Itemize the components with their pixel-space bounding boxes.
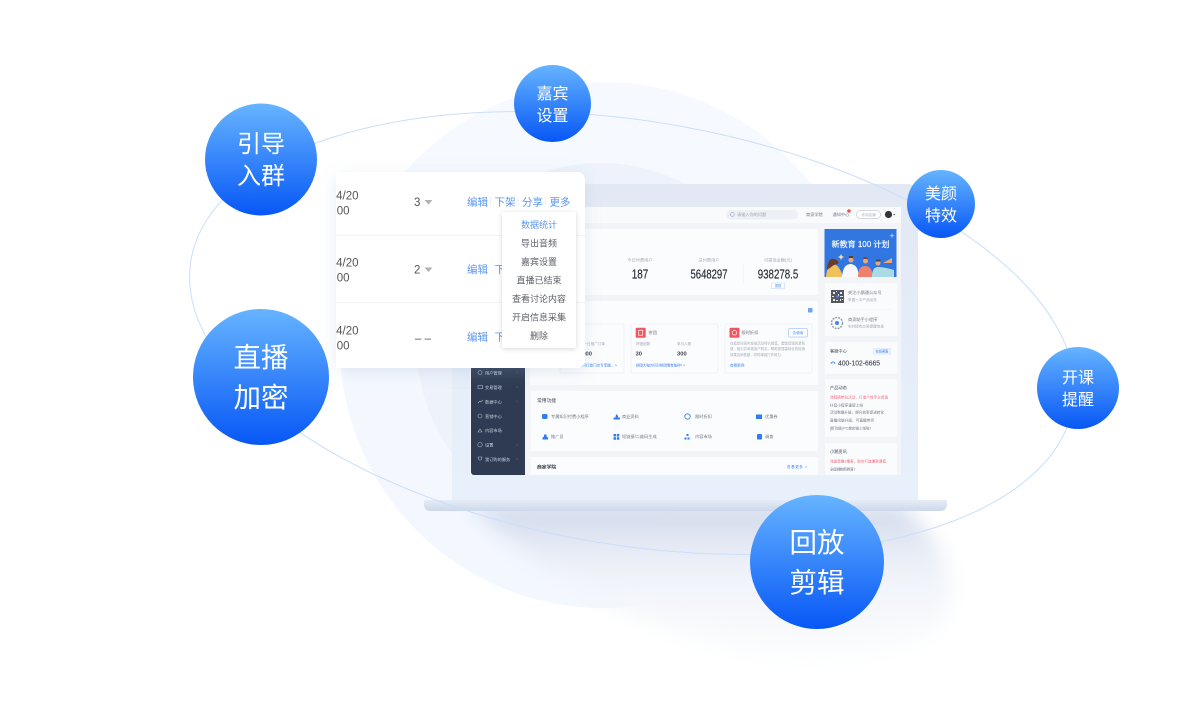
laptop base	[424, 500, 947, 511]
card: promotion: 一日推广订单	[583, 341, 605, 346]
bubble: 直播加密	[193, 309, 329, 445]
sidebar: 营销中心	[485, 413, 503, 420]
bubble: 开课提醒	[1037, 347, 1119, 429]
common functions panel: 限时折扣	[695, 413, 712, 420]
dropdown menu: 开启信息采集	[512, 312, 566, 322]
customer service card: 客服中心	[830, 348, 848, 354]
dashboard stats panel: 5648297	[690, 268, 728, 282]
QR codes card	[825, 283, 897, 336]
bubble: 回放剪辑: 回放	[790, 527, 844, 558]
row 1: 00:00	[321, 205, 350, 217]
row 1: 分享	[522, 196, 543, 208]
banner	[824, 229, 896, 277]
bubble: 美颜特效: 特效	[925, 207, 957, 225]
common functions panel: 调查	[765, 433, 774, 440]
row 3: – –	[415, 333, 432, 345]
common functions panel: 内容市场	[695, 433, 712, 440]
background circle: inner	[417, 163, 783, 529]
customer service card	[825, 342, 897, 374]
bubble: 嘉宾设置	[514, 65, 591, 142]
row 3: 00:00	[321, 340, 350, 352]
row 3	[336, 326, 502, 350]
row 1: 下架	[494, 196, 516, 208]
QR codes card: 关注小鹅通公众号	[848, 289, 882, 296]
common functions panel: 常用功能	[537, 397, 556, 404]
sidebar	[471, 340, 525, 475]
row 2: 04/20	[330, 258, 358, 270]
row 2: 2	[414, 264, 420, 276]
laptop lid	[452, 184, 918, 502]
news flash card: 小鹅资讯	[830, 448, 848, 455]
bubble: 嘉宾设置: 嘉宾	[536, 85, 569, 103]
card: flash sale	[725, 324, 812, 373]
QR codes card: 掌握一手产品动态	[848, 297, 877, 302]
product news card	[825, 379, 897, 437]
bubble: 开课提醒: 提醒	[1062, 391, 1094, 409]
row 3: 编辑	[467, 330, 488, 344]
dropdown menu: 直播已结束	[516, 274, 562, 286]
right column	[824, 229, 897, 475]
dashboard stats panel: 187	[632, 268, 648, 282]
card: group buying: 30	[636, 352, 642, 358]
bubble: 嘉宾设置: 设置	[536, 107, 569, 125]
marketing tools panel	[530, 301, 818, 385]
card: promotion: 如何打造门店专享搬... >	[579, 362, 617, 367]
dropdown menu: 导出音频	[521, 238, 557, 248]
QR codes card: 实时接收交易提醒信息	[848, 324, 884, 329]
common functions panel: 优惠券	[765, 413, 778, 420]
dashboard stats panel: 提现	[775, 283, 782, 288]
product news card: 活动数据升级，提升效率促进转化	[830, 410, 884, 415]
product news card: 流程随带拉活动，打造个性专业促销	[830, 395, 888, 400]
news flash card	[825, 443, 897, 475]
dropdown menu	[502, 212, 576, 348]
news flash card: 流量策略2爆表，助你打造爆款课程	[830, 458, 886, 463]
dashboard stats panel: 可提现金额(元)	[764, 256, 793, 264]
orbit ellipse	[156, 51, 1108, 615]
card: group buying	[631, 324, 718, 373]
product news card: 抖音小程序重磅上线	[830, 402, 863, 407]
card: group buying: 拼团团数	[636, 341, 651, 346]
row 1: 3	[414, 197, 420, 209]
sidebar: 交易管理	[485, 384, 503, 391]
customer service card: 400-102-6665	[838, 358, 880, 368]
card: flash sale: 效果及销售额，同时增强打折效力。	[730, 352, 784, 357]
bubble: 回放剪辑: 剪辑	[790, 567, 844, 598]
dropdown menu: 嘉宾设置	[521, 256, 557, 267]
bubble: 直播加密: 加密	[234, 382, 288, 413]
dropdown menu: 数据统计	[521, 219, 557, 230]
screen header bar: 通知中心	[832, 211, 850, 218]
card: promotion: 3000	[579, 352, 592, 358]
screen header bar	[525, 207, 901, 223]
bubble: 直播加密: 直播	[234, 342, 288, 373]
row 2: 编辑	[467, 263, 488, 276]
dashboard stats panel: 今日付费用户	[627, 256, 653, 264]
row 2	[336, 258, 502, 282]
dashboard stats panel: 总付费用户	[699, 256, 719, 264]
card: flash sale: 感，吸引并刺激用户购买，帮助您提高转化的促销	[730, 346, 805, 351]
bubble: 引导入群: 入群	[237, 163, 285, 190]
bubble: 引导入群: 引导	[237, 131, 285, 158]
product news card: [新功能] PC端店铺上线啦！	[830, 426, 873, 431]
dashboard stats panel: 938278.5	[758, 268, 798, 282]
card: flash sale: 在指定时间内发放活动特价销售，塑造促销的紧张	[730, 341, 805, 346]
card: flash sale: 去使用	[793, 330, 804, 335]
row 3: 04/20	[330, 325, 358, 337]
screen header bar: 请输入你的问题	[737, 211, 767, 218]
bubble: 引导入群	[205, 104, 317, 216]
bubble: 美颜特效: 美颜	[925, 185, 957, 203]
row 1: 04/20	[330, 190, 358, 202]
row 3: 下架	[494, 332, 516, 344]
row 1: 更多	[550, 196, 570, 208]
news flash card: 全面拥抱新教育！	[830, 466, 857, 471]
common functions panel	[530, 391, 818, 451]
card: promotion	[560, 324, 624, 373]
sidebar: 设置	[485, 441, 493, 448]
product news card: 产品动态	[830, 384, 847, 391]
card: group buying: 参与人数	[677, 341, 692, 346]
row 1	[336, 190, 570, 214]
banner: 新教育 100 计划	[832, 239, 889, 249]
screen header bar: 商家学院	[806, 211, 824, 218]
card: flash sale: 查看案例	[730, 362, 745, 367]
dashboard stats panel	[530, 229, 818, 295]
bubble: 回放剪辑	[750, 495, 884, 629]
customer service card: 在线客服	[876, 349, 889, 354]
card: group buying: 拼团	[648, 329, 657, 336]
sidebar: 用户管理	[485, 369, 503, 376]
dropdown menu: 查看讨论内容	[512, 293, 566, 304]
common functions panel: 推广员	[551, 433, 564, 440]
dropdown menu: 删除	[530, 330, 548, 341]
business academy panel: 商家学院	[537, 464, 556, 470]
laptop	[424, 184, 947, 511]
background circle: outer	[340, 82, 866, 608]
bubble: 开课提醒: 开课	[1062, 369, 1094, 387]
table card	[321, 172, 585, 368]
bubble: 美颜特效	[907, 170, 975, 238]
screen header bar: 访问店铺	[861, 212, 876, 217]
product news card: 直播间能升级，可直播带货	[830, 418, 874, 423]
common functions panel: 短链接/二维码生成	[622, 433, 657, 440]
row 2: 00:00	[321, 273, 350, 285]
common functions panel: 商业资料	[622, 413, 640, 420]
laptop shadow	[470, 505, 951, 658]
QR codes card: 商家助手小程序	[848, 316, 877, 323]
sidebar: 内容市场	[485, 427, 502, 434]
business academy panel	[530, 457, 818, 475]
row 2: 下架	[494, 264, 516, 276]
sidebar: 我订购的服务	[485, 456, 511, 463]
card: flash sale: 限时折扣	[742, 329, 758, 336]
laptop screen	[470, 207, 901, 475]
business academy panel: 查看更多 >	[787, 464, 807, 469]
common functions panel: 专属知识付费小程序	[551, 413, 589, 420]
card: group buying: 拼团大咖为何对拼团情有独钟? >	[636, 362, 685, 367]
row 1: 编辑	[467, 196, 488, 208]
sidebar: 数据中心	[485, 398, 503, 405]
card: group buying: 300	[677, 352, 687, 358]
